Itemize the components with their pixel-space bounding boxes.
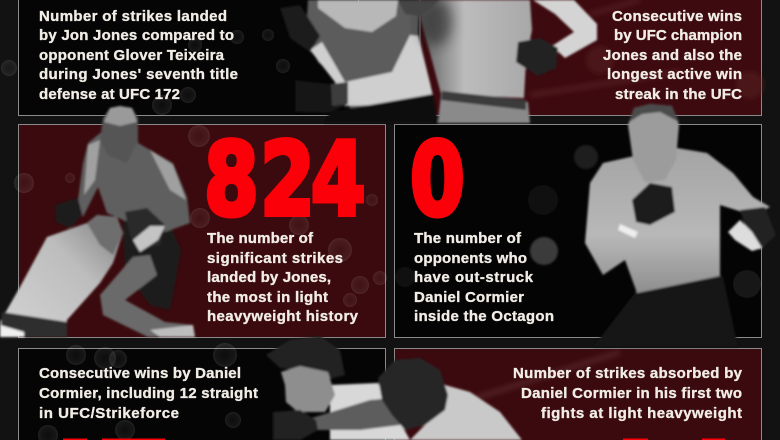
hair [629,104,679,122]
text: consecutive wins by Cormier: Consecutive wins by Daniel [39,365,241,382]
text: significant strikes: The number of [207,230,314,247]
heading text: strikes landed: by Jon Jones compared to [39,27,234,44]
Jones upper glove [398,0,440,16]
Teixeira raised glove [280,5,320,52]
Cormier head [378,358,448,430]
Jones glove [516,38,558,76]
big number: 824: 824 [204,122,366,239]
cropped number tops: bottom left [63,438,165,440]
panel: bottom left [18,343,386,440]
panel: top left [1,0,358,116]
punching arm [312,398,400,430]
light streak [470,352,620,400]
Jones shorts [438,94,530,123]
text: consecutive wins by Jones: streak in the UFC [615,86,742,103]
opponent foot [0,325,24,337]
Jones shorts [123,215,181,310]
big number: 0: 0 [410,122,465,239]
panel: bottom right [394,348,762,440]
text: strikes absorbed: fights at light heavyweight [541,405,742,422]
text: significant strikes: heavyweight history [207,308,359,325]
Teixeira arm [310,35,434,106]
heading text: strikes landed: Number of strikes landed [39,8,227,25]
opponent shorts [0,312,67,337]
Jones arm [533,0,597,58]
heading text: strikes landed: defense at UFC 172 [39,86,180,103]
Jones torso [420,0,532,98]
text: significant strikes: landed by Jones, [207,269,331,286]
Nelson glove [273,410,318,440]
right hand [728,220,762,251]
pants [593,276,738,347]
left glove [632,183,675,225]
highlights [84,140,186,200]
Jones torso and arms [78,130,190,232]
Teixeira head [318,0,398,32]
heading text: strikes landed: opponent Glover Teixeira [39,47,225,64]
panel: top right [420,0,764,116]
Teixeira wrist wrap [331,82,348,106]
bokeh: top left [1,29,290,115]
Jones head [100,106,138,163]
text: consecutive wins by Jones: Consecutive wins [612,8,742,25]
text: significant strikes: significant strikes [207,250,343,267]
opponent body [0,215,123,337]
light streaks [530,0,764,99]
Nelson face [281,366,335,412]
panel: middle left [14,124,387,338]
Nelson body [330,383,410,440]
opponent head shade [87,215,123,255]
shadow under arm [420,0,452,46]
wrist wrap [618,224,638,238]
bokeh: middle left [14,125,387,307]
Cormier body [410,385,522,440]
Jones head top highlight [104,106,137,126]
text: opponents: inside the Octagon [414,308,554,325]
Teixeira body [306,0,434,108]
bokeh: middle right [395,145,761,298]
text: opponents: The number of [414,230,522,247]
Nelson hair [266,336,345,380]
torso and arms [585,148,770,293]
Teixeira shorts [325,94,438,123]
Jones waistband [441,91,526,110]
text: consecutive wins by Jones: by UFC champion [614,27,742,44]
Teixeira lower glove [295,80,348,113]
photo: Jones and Teixeira knee [0,106,195,337]
text: significant strikes: the most in light [207,289,328,306]
cropped number tops: bottom right [623,438,725,440]
Jones shin highlight [150,325,195,337]
right glove [740,207,776,250]
text: strikes absorbed: Number of strikes absorbed by [513,365,743,382]
text: strikes absorbed: Daniel Cormier in his first two [521,385,742,402]
text: opponents: have out-struck [414,269,534,286]
head [628,104,679,182]
Jones glove [55,198,82,228]
text: consecutive wins by Cormier: in UFC/Strikeforce [39,405,179,422]
photo: Jones and Teixeira clinch [280,0,597,123]
panel: middle right [394,124,762,338]
text: consecutive wins by Cormier: Cormier, including 12 straight [39,385,258,402]
Jones leg [100,255,195,337]
heading text: strikes landed: during Jones' seventh title [39,66,238,83]
text: opponents: opponents who [414,250,527,267]
text: consecutive wins by Jones: Jones and also the [603,47,742,64]
photo: Cormier punching Nelson [266,336,522,440]
bokeh: bottom left [38,343,241,440]
text: opponents: Daniel Cormier [414,289,524,306]
clinch gloves [125,208,165,250]
text: consecutive wins by Jones: longest active win [607,66,742,83]
photo: Daniel Cormier [585,104,776,347]
